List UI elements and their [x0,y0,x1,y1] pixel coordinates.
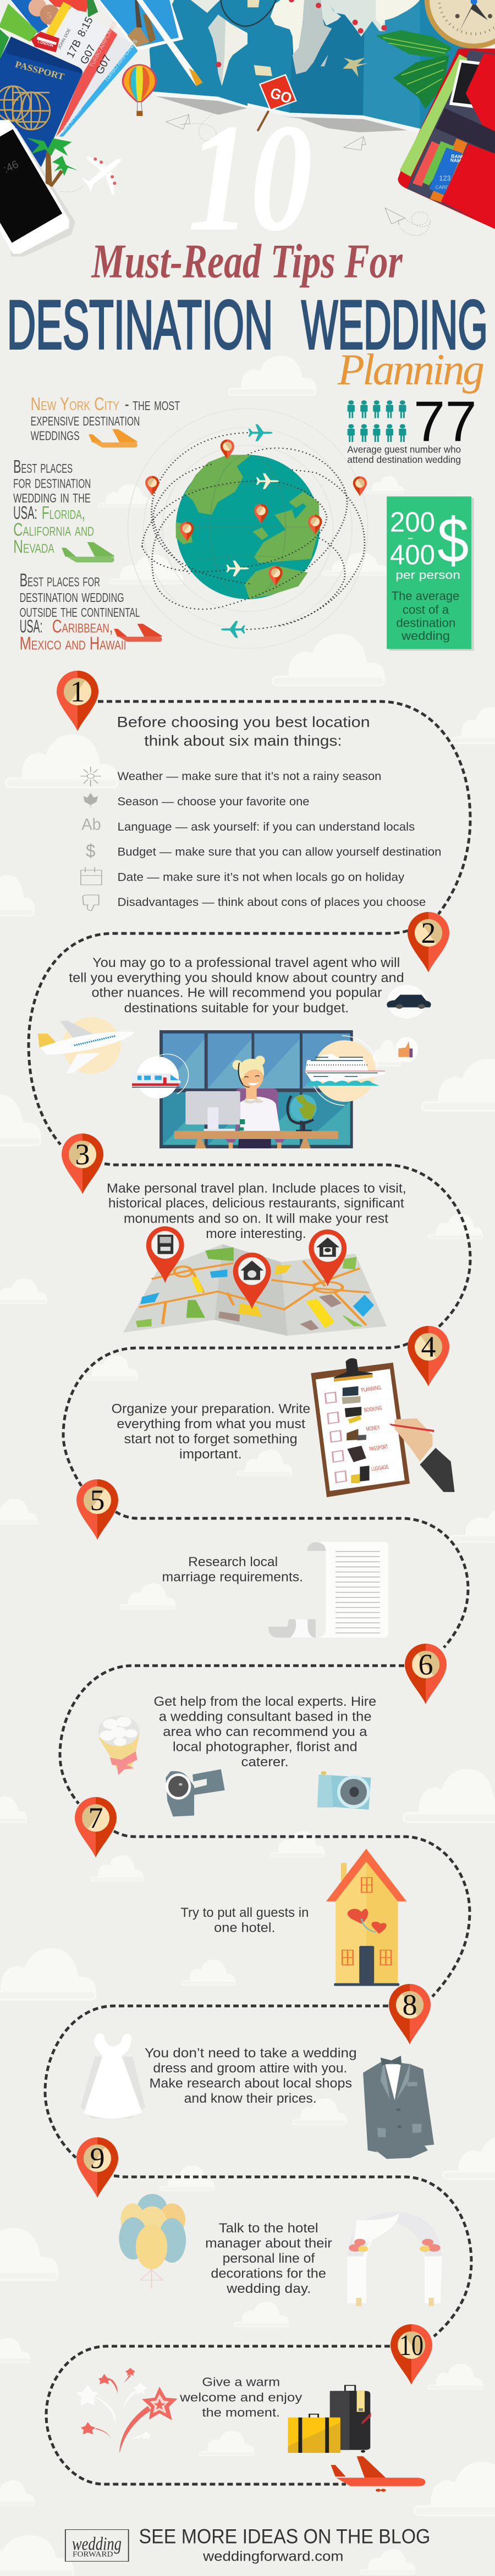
teal plane top [249,424,273,441]
tip 8 text: You don’t need to take a wedding [145,2046,357,2060]
east asia [376,0,420,26]
footer logo: FORWARD [73,2550,113,2558]
tip 2 and 3 illustrations [38,1017,418,1336]
tip 10 text: Give a warm [202,2375,280,2389]
desk [174,1131,338,1148]
yellow ticket [46,2,71,37]
hero: right side, compass, wallet [344,0,495,236]
map left panel [150,0,248,107]
statistics section: wedding in the [13,486,91,506]
text: new york city [31,394,180,444]
red ticket: TURBO AIRPLANES [89,20,118,69]
fireworks [76,2368,178,2453]
folded city map [123,1226,387,1336]
train on white circle [132,1054,189,1098]
map pin south america [216,62,221,67]
cost panel: per person [395,568,460,582]
tip 6 text: caterer. [241,1754,289,1770]
groom tuxedo [363,2056,434,2159]
sign stick [257,111,268,131]
tip 6 text: local photographer, florist and [173,1739,358,1754]
tip 1 section [80,714,441,910]
tip 2 text: other nuances. He will recommend you popular [91,985,382,1000]
magnifying glass [221,0,276,26]
map shadows [220,100,413,132]
tip 7 pin [75,1797,117,1858]
tip 2 pin [408,912,449,972]
clipboard [311,1358,410,1497]
icon: language: Ab [81,816,101,834]
hotel house [326,1849,406,1986]
wallet: 123 [439,174,450,182]
tip 8 text [145,2046,357,2106]
tip 5 pin [76,1479,118,1540]
travel agent woman [233,1055,280,1131]
map light fold panel [363,0,420,129]
tip 4 text: everything from what you must [117,1416,305,1431]
map blue base [220,0,477,132]
white ticket [61,35,133,136]
palm tree [26,138,78,187]
title: big 10: 10 [188,92,312,263]
tip 7 text [180,1905,309,1935]
bouquet [98,1716,140,1775]
cost panel: 200 [390,507,435,538]
tip 6 text [154,1694,376,1770]
tip 7 pin: 7 [88,1801,103,1834]
phone: :46 [2,158,20,176]
blue card [11,0,48,33]
tip 5 pin: 5 [90,1484,105,1517]
tip 6 and 7 section [98,1694,406,1986]
red card [48,0,90,12]
statistics section [13,390,477,653]
orange plane [89,429,139,447]
text: best places outside usa: USA: [20,616,42,637]
white ticket: G07 [94,53,114,76]
computer monitor [185,1091,240,1131]
tip 8 text: and know their prices. [184,2091,317,2106]
photo camera [317,1771,371,1810]
pen [136,0,202,86]
tip 1 heading [117,714,370,749]
green leaf [0,29,9,59]
attraction pin [309,1230,346,1286]
tip 5 text: Research local [188,1554,278,1569]
cruise ship on cream circle [305,1036,385,1105]
cream plane upper [256,473,279,489]
footer logo: wedding [72,2534,122,2554]
tip 2 pin: 2 [421,916,436,949]
green plane [62,542,116,562]
tip 4 text [112,1401,310,1461]
text: new york city: New York City [31,394,119,414]
tip 5 text: marriage requirements. [162,1569,303,1584]
madagascar [321,54,328,67]
text: best places usa: Best places [13,456,73,477]
coins: 5 [47,10,52,20]
tip 1 pin: 1 [70,675,85,708]
dashed flight loop [400,212,431,236]
icon: thumbs down [82,895,99,910]
globe [176,455,320,599]
hero: world map middle [220,0,477,134]
wallet: BANK [451,153,465,160]
tip 10 section [65,2368,430,2564]
wallet [398,48,495,229]
icon: budget: $ [86,841,95,861]
map shadow [156,96,248,114]
tip 3 text [107,1181,406,1241]
paper plane sketch 3 [385,208,405,225]
tip 9 text: personal line of [223,2251,315,2266]
red ticket [56,20,118,136]
text: new york city: weddings [31,424,80,444]
dashed route connecting all tips [29,701,471,2484]
text: best places outside usa: Caribbean, [52,616,113,637]
route end airplane [331,2456,425,2492]
dotted flight orbits [142,433,365,629]
tip 10 text [179,2375,302,2419]
tip 9 text: wedding day. [226,2281,311,2296]
east africa [293,0,332,74]
tip 4 text: important. [179,1446,242,1461]
map bottom edge [153,92,248,108]
tip 9 text [205,2221,332,2296]
boarding pass: 8:15 [76,15,96,39]
clipboard: PLANNING [360,1384,382,1394]
footer website: weddingforward.com [202,2549,344,2564]
white airplane [81,157,121,195]
tip 7 text: Try to put all guests in [180,1905,309,1920]
text: best places usa: Nevada [13,536,54,556]
checklist text [118,770,441,909]
map bottom edge [220,97,420,134]
coins [29,0,60,25]
sign board [260,75,296,110]
tip 6 pin: 6 [418,1648,433,1681]
checklist text: Season — choose your favorite one [118,794,310,808]
tip 6 text: Get help from the local experts. Hire [154,1694,376,1709]
balloons [119,2194,186,2288]
clipboard: MONEY [365,1424,381,1432]
tip 8 pin [389,1984,431,2044]
office window panel [160,1030,353,1148]
tip 2 text [69,955,404,1015]
north america [191,0,220,13]
tip 4 and 5 section [112,1358,455,1638]
green card [0,4,37,42]
paper plane sketch 1 [166,114,190,129]
hero: left side travel objects [0,0,276,257]
paper plane sketch 2 [344,136,366,150]
tip 10 text: the moment. [202,2406,280,2419]
tip 8 text: dress and groom attire with you. [153,2061,347,2076]
cost panel: wedding [401,629,450,643]
blue ticket: TURBO AIRPLANES [103,38,139,83]
wallet: NAME [450,157,465,164]
red plane [114,624,163,642]
boarding pass: G07 [79,43,98,67]
restaurant pin [233,1253,271,1309]
island shaped like a plane [343,58,367,77]
top island [238,0,260,7]
map pins [289,0,387,34]
cream plane lower [226,561,249,576]
thumbs up [395,1037,418,1062]
passport [0,37,82,167]
tip 4 text: start not to forget something [124,1431,298,1446]
tip 5 text [162,1554,303,1584]
tip 8 pin: 8 [403,1988,417,2021]
london bus [31,31,59,52]
tip 10 text: welcome and enjoy [179,2390,302,2404]
title: planning: Planning [337,346,485,394]
text: best places usa: Florida, [42,502,85,523]
clipboard: PASSPORT [369,1443,389,1452]
text: best places outside usa: Mexico and Hawaii [20,633,127,653]
phone [0,120,75,257]
orbit rings [128,408,368,648]
statistics section: - the most [125,394,180,414]
wedding arch [347,2212,442,2303]
tip 3 pin: 3 [75,1138,90,1171]
guest caption [347,444,461,465]
statistics section: for destination [13,472,91,491]
cost panel: destination [396,616,455,629]
cost panel: - [407,532,414,545]
tip 3 pin [62,1134,103,1194]
document scroll [268,1542,388,1638]
statistics section: outside the continental [20,600,140,621]
cost panel: The average [392,589,459,602]
tip 1 heading: Before choosing you best location [117,714,370,731]
boarding pass: JOHN DOE [57,27,72,50]
arabia and asia [321,0,385,37]
go sign [257,75,296,131]
tip 9 text: decorations for the [211,2266,326,2281]
tip 4 pin: 4 [421,1330,436,1363]
arch base posts [356,2298,434,2306]
cost panel: cost of a [403,602,449,616]
tip 3 text: more interesting. [206,1226,306,1241]
text: best places usa: USA: [13,502,37,523]
tip 4 pin [408,1326,449,1386]
blue ticket: AIRPLANES [60,106,83,135]
icon: car [387,985,431,1019]
office chair [235,1088,278,1132]
tip 9 text: Talk to the hotel [219,2221,318,2236]
footer logo [65,2530,129,2561]
video camera [166,1769,225,1816]
london bus: LONDON [37,40,54,48]
text: best places usa [13,456,94,556]
icon: sun [80,767,101,787]
palm frond one [376,30,452,59]
guest number pictogram [348,400,406,442]
tip 2 text: destinations suitable for your budget. [124,1000,349,1015]
teal plane bottom [221,621,245,638]
tip 4 text: Organize your preparation. Write [112,1401,310,1416]
statistics section: California and [13,519,94,540]
hot air balloon [122,64,157,116]
travel agent office [132,1030,385,1148]
wedding dress [80,2033,145,2119]
palm frond two [393,55,449,109]
tip 9 pin [76,2137,118,2198]
tip 6 text: a wedding consultant based in the [159,1709,372,1724]
coffee cups [238,1119,245,1131]
tip 7 text: one hotel. [214,1920,276,1935]
text: new york city: expensive destination [31,409,140,429]
desk globe [288,1094,317,1131]
airplane on cream circle [38,1017,134,1074]
green tag [87,0,98,18]
passport: PASSPORT [14,59,65,82]
tip 10 pin: 10 [399,2329,424,2362]
globe map pins [145,439,367,586]
tip 6 pin [405,1644,447,1704]
tip 6 text: area who can recommend you a [163,1724,367,1739]
boarding pass [53,7,133,73]
clipboard: BOOKING [363,1405,383,1413]
photo [98,0,183,51]
sign label: GO [268,84,294,107]
tip 2 section [69,955,431,1019]
text: best places outside usa: Best places for [20,570,100,590]
cost panel: $ [437,506,469,576]
boarding pass: 17B [65,38,84,60]
cost panel [387,496,474,651]
map dark fold panel [290,0,365,115]
text: best places outside usa: destination wedding [20,585,124,606]
south america shaded part [208,15,226,86]
text: best places outside usa [20,570,140,653]
hand writing [389,1418,455,1492]
tip 8 and 9 section [80,2033,442,2303]
icon: maple leaf [84,793,98,809]
clipboard: LUGGAGE [370,1463,389,1472]
compass [425,0,495,48]
icon: calendar [81,867,102,885]
tip 9 pin: 9 [90,2142,105,2175]
south america [208,15,248,86]
west africa [271,0,304,55]
tip 1 heading: think about six main things: [144,733,342,749]
wallet: CARD [436,184,449,190]
tip 8 text: Make research about local shops [150,2076,352,2091]
tip 1 pin [57,671,98,731]
cost panel: 400 [390,539,435,570]
palm ribs [383,37,447,93]
island left [254,65,272,76]
tip 9 text: manager about their [205,2236,332,2251]
blue ticket [59,38,139,136]
luggage [288,2385,371,2453]
checklist text: Weather — make sure that it’s not a rainy season [118,770,381,783]
hotel pin [146,1226,184,1283]
tip 10 pin [391,2324,432,2385]
dashed flight loop [61,113,216,192]
